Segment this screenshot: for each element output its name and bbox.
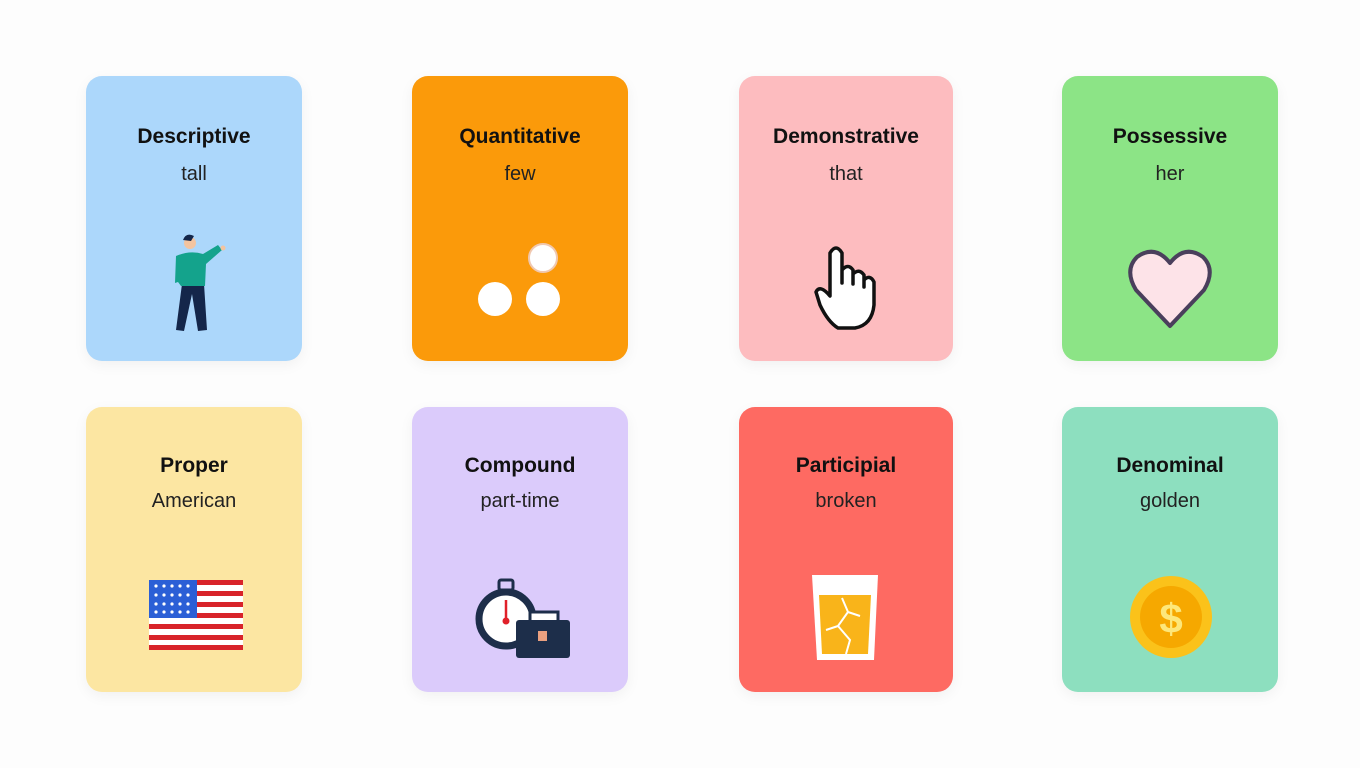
card: descriptive: Descriptive: [137, 125, 251, 148]
icon: circles: [478, 244, 560, 316]
card: compound: Compound: [465, 454, 575, 477]
icon: broken glass: [812, 575, 878, 660]
card: compound: [412, 407, 628, 692]
card: descriptive: tall: [181, 163, 207, 185]
icon: gold coin: [1130, 576, 1212, 658]
card: proper: Proper: [160, 454, 228, 477]
icon: person: [175, 235, 226, 331]
card: demonstrative: that: [829, 163, 863, 185]
card: quantitative: Quantitative: [459, 125, 581, 148]
icon: pointing hand: [816, 248, 874, 328]
card: participial: broken: [815, 490, 877, 512]
card: descriptive: [86, 76, 302, 361]
card: quantitative: [412, 76, 628, 361]
icon: US flag: [149, 580, 243, 650]
card: proper: [86, 407, 302, 692]
card: participial: Participial: [796, 454, 896, 477]
card: participial: [739, 407, 953, 692]
card: denominal: Denominal: [1116, 454, 1224, 477]
card: compound: part-time: [481, 490, 559, 512]
icon: stopwatch and briefcase: [479, 580, 570, 658]
icon: gold coin: $: [1159, 595, 1183, 642]
card: demonstrative: [739, 76, 953, 361]
card: denominal: [1062, 407, 1278, 692]
card: proper: American: [152, 490, 236, 512]
card: possessive: Possessive: [1113, 125, 1227, 148]
card: possessive: [1062, 76, 1278, 361]
card: demonstrative: Demonstrative: [773, 125, 919, 148]
card: quantitative: few: [504, 163, 536, 185]
card: denominal: golden: [1140, 490, 1200, 512]
card: possessive: her: [1156, 163, 1184, 185]
icon: heart: [1130, 252, 1210, 326]
